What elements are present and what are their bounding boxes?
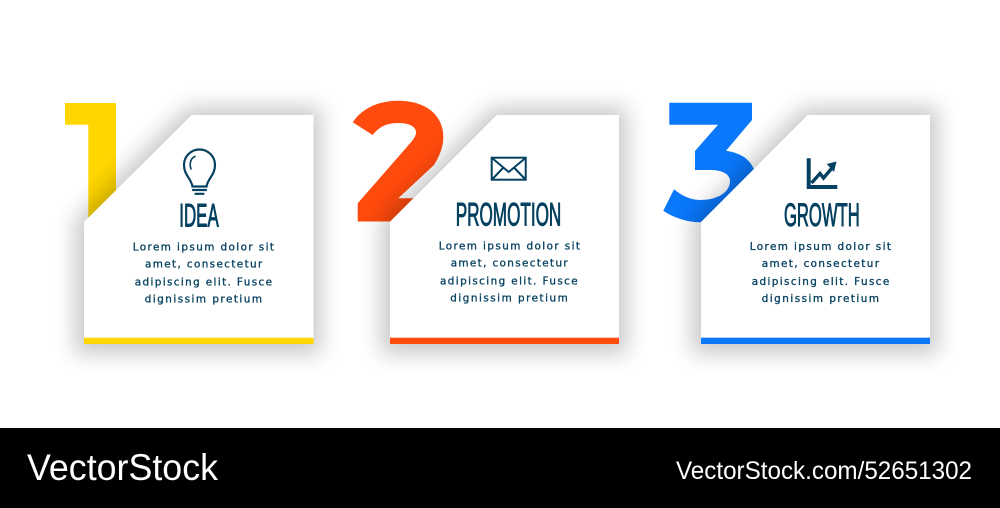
footer band (0, 428, 1000, 508)
card shadow 3 (692, 107, 938, 354)
text block 1: adipiscing elit. Fusce (135, 276, 272, 288)
text block 3: adipiscing elit. Fusce (752, 276, 889, 288)
number 1 (65, 103, 116, 222)
text block 2: adipiscing elit. Fusce (440, 276, 578, 288)
panel: step 1 idea (65, 103, 321, 354)
text block 3 (750, 241, 891, 305)
text block 1: amet, consectetur (145, 258, 263, 270)
text block 1 (133, 242, 274, 306)
heading: promotion: PROMOTION (456, 196, 561, 232)
number 2 (353, 101, 443, 222)
heading: growth: GROWTH (784, 197, 860, 233)
accent bar 1 (84, 338, 314, 344)
icon: envelope (492, 158, 526, 180)
text block 2 (439, 240, 580, 304)
text block 2: amet, consectetur (451, 258, 568, 270)
icon: light bulb (184, 149, 215, 194)
text block 2: dignissim pretium (450, 292, 568, 304)
accent bar 2 (390, 338, 619, 344)
text block 3: Lorem ipsum dolor sit (750, 241, 891, 253)
card 1 (84, 115, 314, 344)
panel: step 2 promotion (353, 101, 627, 354)
text block 1: Lorem ipsum dolor sit (133, 242, 274, 254)
text block 2: Lorem ipsum dolor sit (439, 240, 580, 252)
heading: idea: IDEA (179, 198, 219, 234)
brand name: VectorStock (27, 447, 218, 488)
number 3 (663, 103, 754, 222)
card shadow 2 (381, 107, 627, 354)
icon: growth chart (807, 158, 837, 189)
text block 1: dignissim pretium (145, 294, 262, 306)
card shadow 1 (75, 107, 321, 354)
panel: step 3 growth (663, 103, 938, 354)
image id: VectorStock.com/52651302 (676, 457, 972, 485)
card 3 (701, 115, 930, 344)
card 2 (390, 115, 619, 344)
text block 3: amet, consectetur (762, 258, 880, 270)
text block 3: dignissim pretium (762, 293, 879, 305)
accent bar 3 (701, 338, 930, 344)
